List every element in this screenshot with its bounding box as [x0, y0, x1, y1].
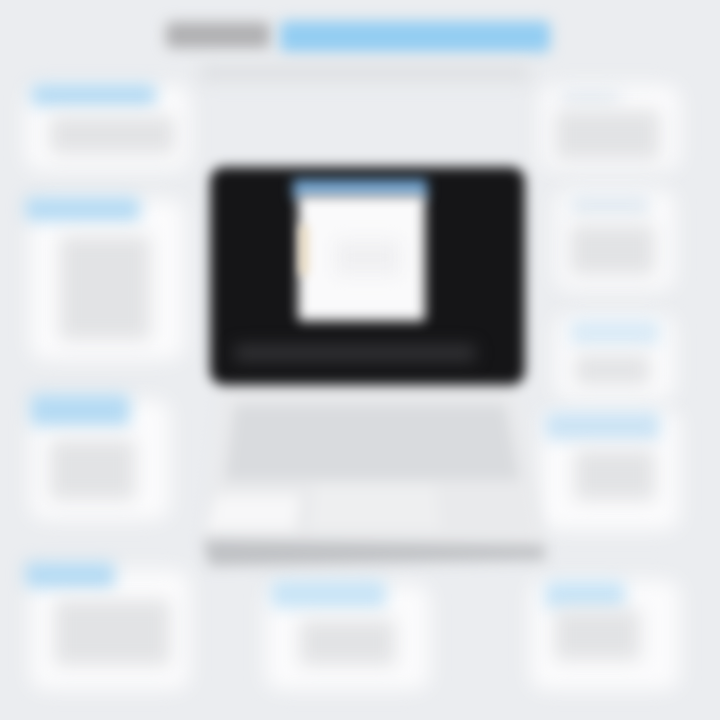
text: bottom right [555, 610, 640, 660]
title: grey part [166, 22, 270, 48]
text: left 1 [50, 116, 175, 154]
panel: left 3 [23, 386, 170, 520]
title: blue part [280, 21, 550, 52]
heading: left 2 [25, 197, 140, 221]
panel: right 1 [540, 84, 680, 167]
panel: left 2 [18, 188, 185, 360]
screen glow row [235, 345, 475, 361]
text: right 1 [555, 110, 660, 160]
heading: left 3 [30, 394, 130, 426]
window accent [300, 225, 308, 275]
heading: bottom right [545, 581, 625, 609]
text: left 3 [50, 440, 135, 500]
window [298, 195, 425, 321]
panel: right 4 [540, 408, 680, 530]
panel: bottom middle [265, 574, 430, 690]
laptop screen [210, 167, 525, 385]
window title bar [293, 179, 427, 199]
text: right 3 [575, 355, 650, 385]
heading: left 1 [31, 84, 156, 106]
text: bottom middle [300, 620, 395, 665]
subtitle [200, 64, 530, 82]
heading: right 4 [545, 412, 660, 440]
panel: bottom right [530, 578, 680, 690]
panel: right 2 [554, 192, 675, 289]
text: right 4 [575, 450, 655, 500]
panel: right 3 [554, 322, 675, 398]
text: left 2 [60, 236, 150, 340]
text: left 4 [55, 600, 170, 665]
panel: left 1 [25, 76, 190, 170]
panel: left 4 [17, 553, 190, 690]
laptop illustration [200, 156, 550, 572]
heading: right 3 [570, 320, 660, 345]
title [159, 12, 560, 61]
heading: left 4 [25, 562, 115, 588]
heading: right 1 [560, 90, 620, 104]
window content [335, 240, 400, 275]
heading: bottom middle [271, 580, 386, 608]
heading: right 2 [570, 195, 650, 215]
laptop base [200, 402, 550, 572]
text: right 2 [570, 225, 655, 275]
